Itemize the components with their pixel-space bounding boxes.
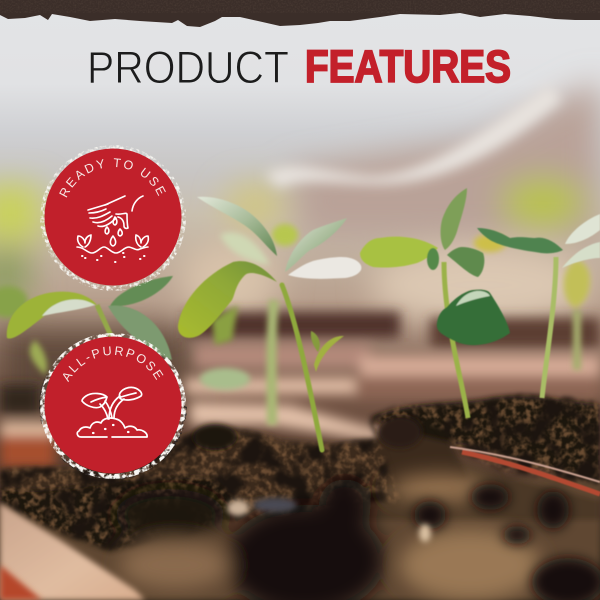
rough dark scratches [40, 334, 186, 478]
seedling: far right [477, 214, 600, 398]
soil grain [0, 385, 600, 560]
lower large leaf [437, 290, 510, 345]
title: FEATURES [305, 41, 511, 92]
icon: sprout on soil mound [77, 387, 147, 437]
soil mound [0, 385, 600, 600]
leaf pair [477, 228, 563, 253]
large yellow-green leaf [178, 261, 277, 338]
small mid leaf [427, 248, 439, 270]
drooping leaf [108, 305, 172, 360]
pale horizontal leaf [288, 257, 361, 279]
stem [444, 262, 468, 418]
small right leaf [447, 247, 484, 277]
torn dark paper strip [0, 0, 600, 27]
pale upper-right leaf [285, 218, 347, 272]
seedling: left, behind badges [7, 276, 173, 360]
background seedlings, blurred [0, 224, 590, 425]
stem [282, 285, 322, 450]
badge: ready to use [40, 145, 186, 291]
curved label: READY TO USE [59, 158, 166, 198]
pale upper-left leaf [197, 197, 277, 256]
pale leaves [565, 214, 600, 244]
small side shoot [314, 336, 344, 372]
icon: hand sowing seeds over soil [77, 196, 148, 262]
stem [542, 257, 556, 398]
yellow leaf [7, 292, 97, 339]
yellow-green left leaf [360, 237, 438, 268]
seedling: centre [178, 197, 361, 450]
red disc [44, 336, 182, 474]
right leaf [110, 276, 173, 306]
rough white ring [42, 336, 184, 476]
title [87, 41, 511, 93]
upper leaf [441, 188, 467, 250]
badge: all-purpose [39, 333, 187, 480]
tray rim right [450, 447, 600, 494]
title: PRODUCT [87, 42, 289, 93]
tray rim bottom left [0, 503, 145, 600]
rough white ring [42, 148, 184, 288]
stem [97, 305, 112, 338]
curved label: ALL-PURPOSE [63, 346, 164, 382]
seedling: right-centre [360, 188, 510, 418]
red disc [44, 148, 182, 286]
pale leaf [42, 299, 95, 316]
